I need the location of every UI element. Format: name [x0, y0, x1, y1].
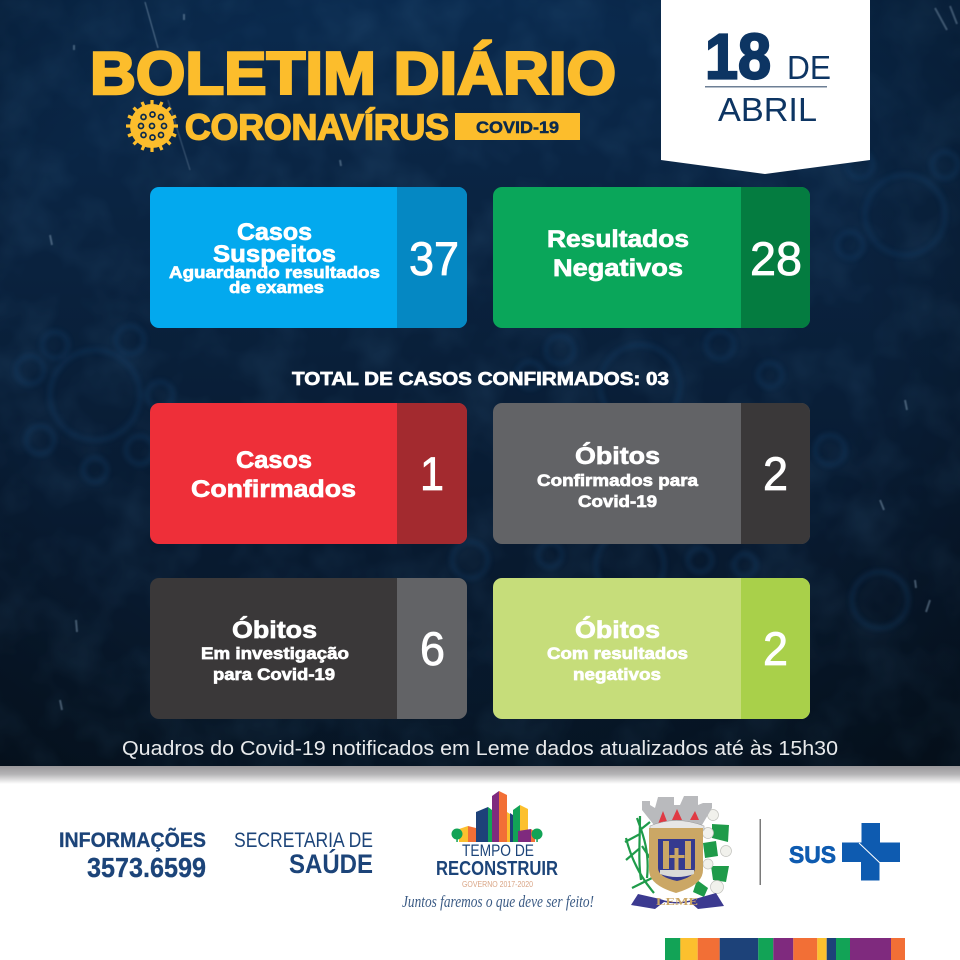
card: resultados negativos: Resultados: [547, 226, 689, 253]
secretaria de saúde: [234, 829, 373, 879]
card: casos suspeitos: Casos: [237, 219, 312, 246]
card: óbitos com resultados negativos: [493, 578, 810, 719]
heading: total de casos confirmados: TOTAL DE CASOS CONFIRMADOS: 03: [292, 369, 669, 389]
contact information: [59, 828, 206, 883]
card: óbitos confirmados: Confirmados para: [537, 471, 699, 490]
card: resultados negativos: Negativos: [553, 255, 683, 282]
contact information: 3573.6599: [87, 852, 206, 883]
card: casos confirmados: [150, 403, 467, 544]
card: óbitos em investigação: [150, 578, 467, 719]
card: casos suspeitos: Aguardando resultados: [169, 263, 380, 282]
date banner: 18: [705, 20, 771, 92]
background: dark blue texture: [0, 0, 960, 767]
logo: tempo de reconstruir: RECONSTRUIR: [436, 858, 558, 880]
card: óbitos em investigação: Em investigação: [201, 644, 349, 663]
footer shadow band: [0, 766, 960, 784]
badge: Covid-19: COVID-19: [476, 118, 559, 137]
date banner: DE: [787, 49, 831, 86]
title: Boletim Diário: BOLETIM DIÁRIO: [90, 40, 616, 107]
card: óbitos com resultados negativos: Óbitos: [575, 616, 660, 644]
card: casos suspeitos: 37: [409, 232, 459, 285]
card: casos suspeitos: [150, 187, 467, 328]
colour strip: [665, 938, 905, 960]
contact information: INFORMAÇÕES: [59, 828, 206, 852]
divider: [760, 819, 761, 885]
logo: tempo de reconstruir: [402, 791, 594, 911]
card: óbitos em investigação: para Covid-19: [213, 665, 335, 684]
card: óbitos com resultados negativos: negativos: [573, 665, 661, 684]
secretaria de saúde: SAÚDE: [289, 848, 373, 879]
crest: brasão de Leme: [625, 796, 732, 909]
card: óbitos com resultados negativos: Com resultados: [547, 644, 688, 663]
card: casos confirmados: Casos: [236, 447, 312, 474]
card: óbitos em investigação: 6: [420, 622, 445, 675]
date banner: [661, 0, 870, 174]
card: óbitos confirmados: Covid-19: [578, 492, 657, 511]
icon: coronavirus: [126, 100, 178, 152]
badge: Covid-19: [455, 113, 580, 140]
logo: tempo de reconstruir: TEMPO DE: [462, 841, 534, 860]
note: data update: Quadros do Covid-19 notificados em Leme dados atualizados até às 15h30: [122, 738, 838, 760]
logo: SUS: [789, 823, 900, 881]
date banner: ABRIL: [718, 91, 817, 128]
card: casos confirmados: 1: [420, 447, 444, 500]
subtitle: Coronavírus: CORONAVÍRUS: [185, 106, 449, 148]
crest: brasão de Leme: LEME: [656, 896, 698, 908]
card: casos confirmados: Confirmados: [191, 476, 356, 503]
card: óbitos confirmados: [493, 403, 810, 544]
card: óbitos confirmados: Óbitos: [575, 442, 660, 470]
secretaria de saúde: SECRETARIA DE: [234, 829, 373, 852]
logo: SUS: SUS: [789, 842, 836, 869]
card: óbitos com resultados negativos: 2: [763, 622, 788, 675]
card: óbitos em investigação: Óbitos: [232, 616, 317, 644]
card: óbitos confirmados: 2: [763, 447, 788, 500]
card: resultados negativos: [493, 187, 810, 328]
card: casos suspeitos: Suspeitos: [213, 241, 336, 268]
card: resultados negativos: 28: [750, 232, 802, 285]
card: casos suspeitos: de exames: [229, 278, 324, 297]
logo: tempo de reconstruir: GOVERNO 2017-2020: [462, 880, 533, 889]
logo: tempo de reconstruir: Juntos faremos o que deve ser feito!: [402, 892, 594, 911]
